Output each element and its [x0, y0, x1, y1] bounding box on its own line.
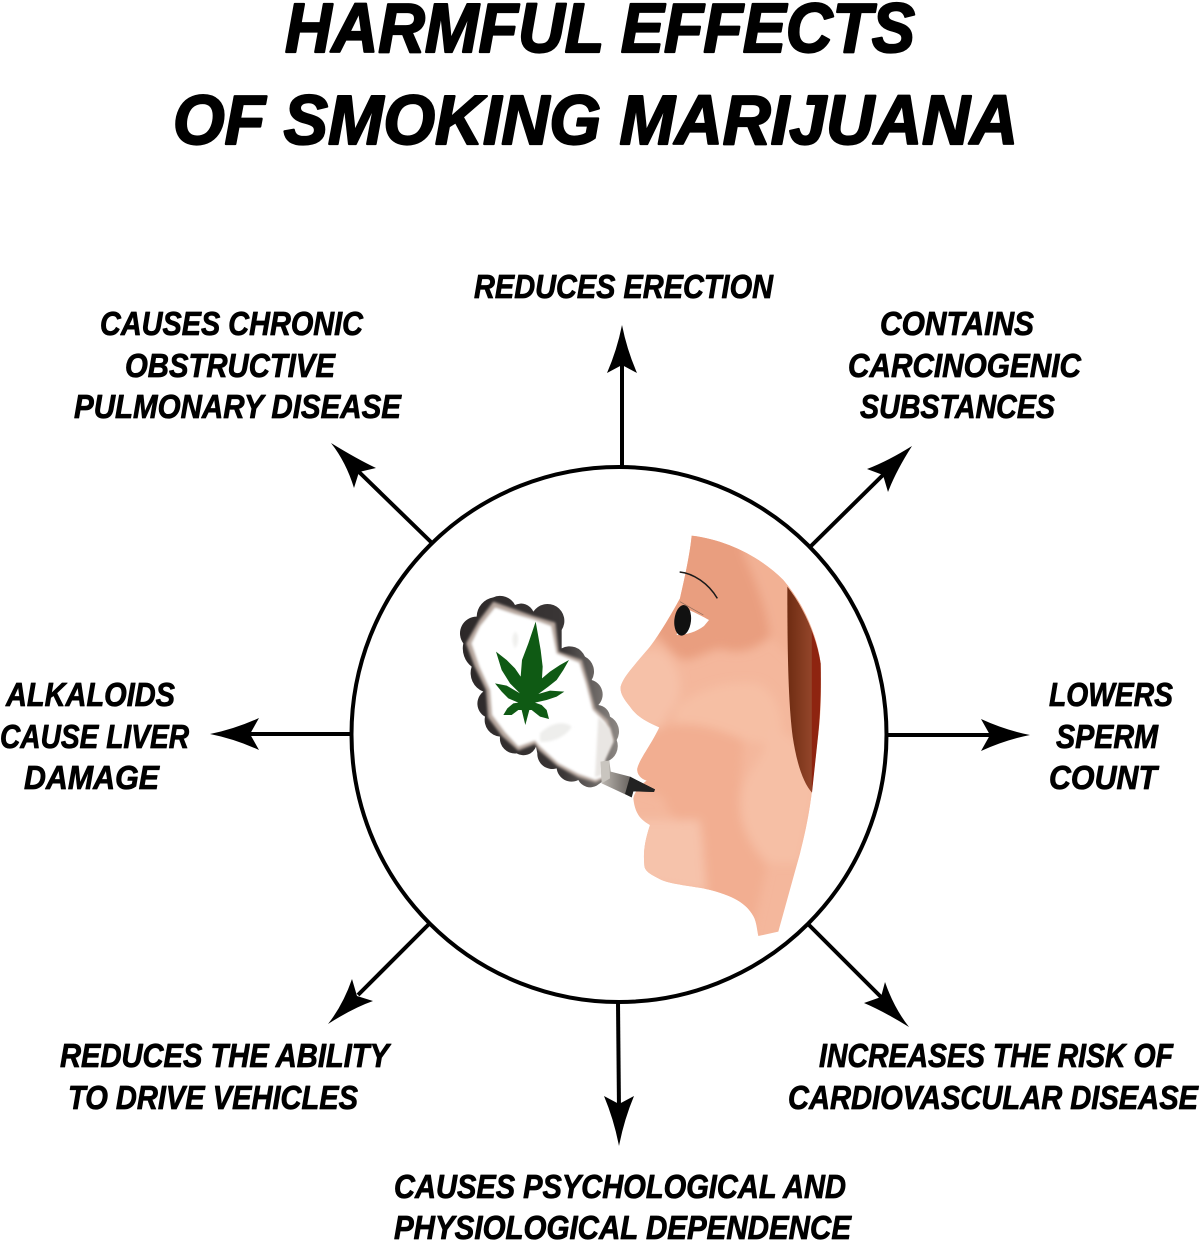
label: alkaloids liver damage: DAMAGE: [24, 759, 160, 796]
label: chronic obstructive pulmonary disease: CAUSES CHRONIC: [100, 305, 364, 342]
eyebrow: [680, 572, 717, 598]
label: cardiovascular risk: [788, 1037, 1199, 1116]
label: lowers sperm count: [1049, 676, 1173, 796]
hair: [787, 587, 821, 793]
title: [173, 0, 1018, 159]
arrow: down to dependence: [604, 1002, 634, 1146]
label: carcinogenic substances: [848, 305, 1082, 425]
arrow: lower left to driving ability: [328, 924, 429, 1024]
title: OF SMOKING MARIJUANA: [173, 81, 1018, 159]
label: chronic obstructive pulmonary disease: [74, 305, 402, 425]
label: alkaloids liver damage: ALKALOIDS: [5, 676, 175, 713]
eye: [673, 602, 709, 636]
label: dependence: [394, 1168, 852, 1240]
arrow: upper right to carcinogenic substances: [810, 446, 912, 547]
label: ability to drive: [60, 1037, 392, 1116]
label: chronic obstructive pulmonary disease: PULMONARY DISEASE: [74, 388, 402, 425]
label: ability to drive: REDUCES THE ABILITY: [60, 1037, 392, 1074]
label: reduces erection: REDUCES ERECTION: [474, 268, 774, 305]
central circle: [352, 467, 886, 1002]
arrow: right to lowers sperm count: [887, 719, 1030, 751]
label: carcinogenic substances: CONTAINS: [880, 305, 1034, 342]
label: dependence: CAUSES PSYCHOLOGICAL AND: [394, 1168, 846, 1205]
label: carcinogenic substances: SUBSTANCES: [860, 388, 1055, 425]
label: lowers sperm count: SPERM: [1056, 718, 1159, 755]
arrow: upper left to chronic pulmonary disease: [331, 443, 432, 543]
label: alkaloids liver damage: [0, 676, 189, 796]
label: lowers sperm count: COUNT: [1049, 759, 1160, 796]
label: lowers sperm count: LOWERS: [1049, 676, 1173, 713]
label: ability to drive: TO DRIVE VEHICLES: [68, 1079, 358, 1116]
illustration: smoker profile: [460, 527, 830, 943]
cannabis leaf: [495, 622, 569, 725]
label: carcinogenic substances: CARCINOGENIC: [848, 347, 1082, 384]
label: chronic obstructive pulmonary disease: OBSTRUCTIVE: [125, 347, 336, 384]
arrow: lower right to cardiovascular disease: [808, 924, 909, 1027]
face: [620, 536, 821, 936]
arrow: left to liver damage: [210, 718, 351, 750]
cigarette: [601, 761, 655, 797]
smoke cloud: [460, 596, 619, 787]
arrow: up to reduces erection: [607, 325, 637, 467]
label: alkaloids liver damage: CAUSE LIVER: [0, 718, 189, 755]
